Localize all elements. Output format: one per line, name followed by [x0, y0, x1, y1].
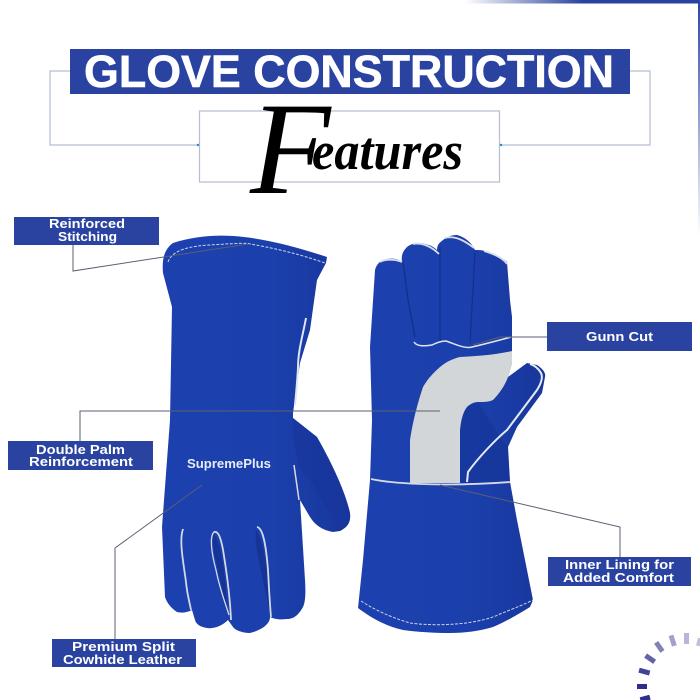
label: Premium Split Cowhide Leather: Premium Split	[72, 639, 176, 654]
label: Double Palm Reinforcement: Reinforcement	[29, 454, 134, 469]
heading: Features script: F	[249, 75, 332, 222]
reinforced palm patch	[410, 351, 512, 483]
label: Gunn Cut: Gunn Cut	[586, 329, 654, 344]
thumb shading	[293, 418, 350, 531]
title bracket frame	[50, 71, 650, 182]
side seam	[295, 318, 306, 405]
label: Inner Lining for Added Comfort: Added Comfort	[563, 570, 675, 585]
brand text: SupremePlus	[187, 456, 271, 471]
glove: palm view	[358, 235, 545, 633]
heading: Features script	[249, 75, 463, 222]
shadow under thumb	[460, 402, 510, 483]
finger gaps	[213, 530, 270, 612]
label: Gunn Cut	[547, 322, 692, 351]
cuff stitching	[168, 243, 325, 263]
finger seams	[181, 465, 299, 620]
heading: Features script: eatures	[312, 121, 463, 181]
label: Reinforced Stitching	[14, 216, 159, 245]
label: Reinforced Stitching: Stitching	[58, 229, 117, 244]
glove: back view	[162, 236, 350, 633]
label: Reinforced Stitching: Reinforced	[49, 216, 125, 231]
top right corner accent	[465, 0, 700, 235]
label: Premium Split Cowhide Leather: Cowhide Leather	[63, 652, 182, 667]
decorative dial bottom right	[637, 633, 700, 700]
finger gusset seam	[414, 337, 511, 347]
label: Inner Lining for Added Comfort	[548, 557, 691, 586]
leader lines	[73, 244, 620, 639]
label: Double Palm Reinforcement: Double Palm	[36, 442, 125, 457]
label: Inner Lining for Added Comfort: Inner Lining for	[565, 557, 674, 572]
thumb seam	[467, 364, 542, 482]
fingertip seams	[380, 237, 507, 264]
wrist seam	[371, 479, 510, 484]
label: Double Palm Reinforcement	[8, 441, 153, 470]
cuff stitching	[361, 600, 533, 625]
finger separators	[403, 247, 475, 343]
label: Premium Split Cowhide Leather	[52, 639, 196, 667]
title banner: GLOVE CONSTRUCTION	[84, 46, 614, 97]
